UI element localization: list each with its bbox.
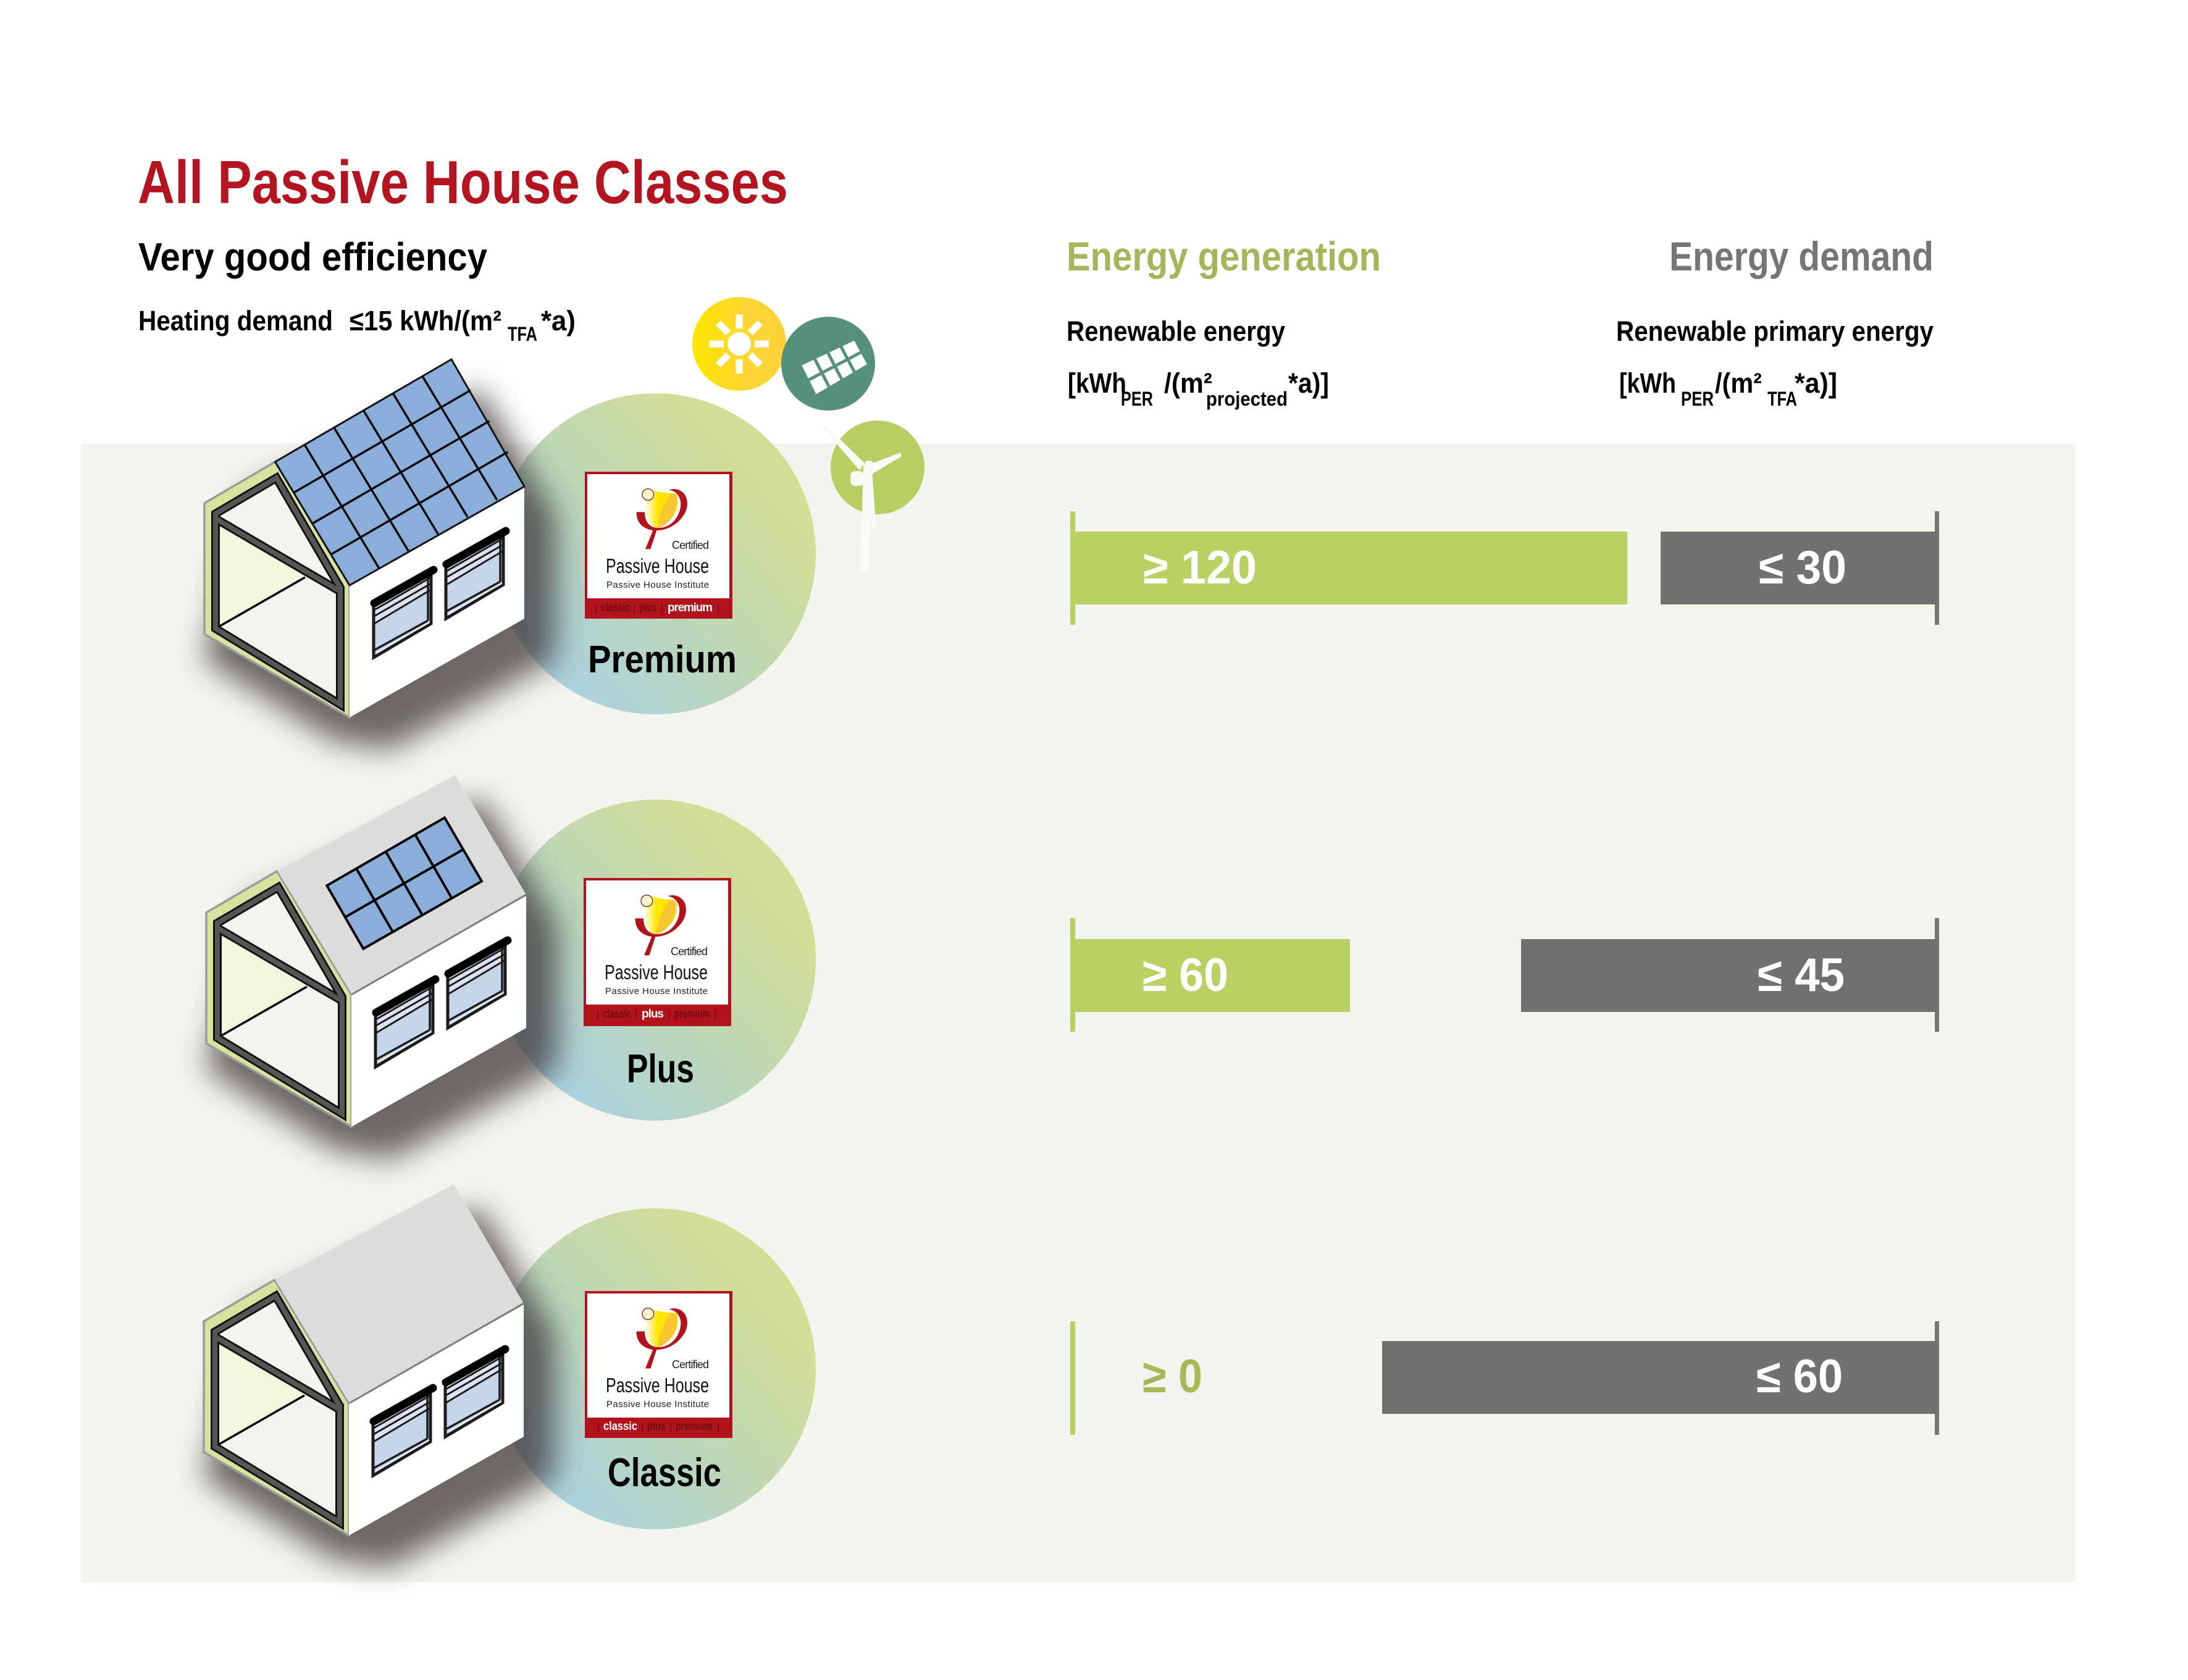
- demand unit label: Renewable primary energy: [1616, 316, 1934, 347]
- premium demand bar: [1661, 511, 1939, 625]
- row: premium: [204, 359, 1939, 750]
- title: All Passive House Classes: [138, 148, 788, 216]
- premium generation bar: ≥ 120: [1143, 541, 1257, 594]
- premium house shadow: [204, 389, 556, 750]
- premium label: Premium: [588, 638, 737, 681]
- demand unit label: [1616, 316, 1934, 410]
- heading: energy generation: Energy generation: [1067, 233, 1381, 279]
- plus generation bar: [1070, 918, 1350, 1032]
- plus label: Plus: [627, 1046, 694, 1091]
- heating demand requirement: ≤15 kWh/(m²: [350, 305, 501, 336]
- classic certificate badge: Passive House: [606, 1374, 709, 1397]
- plus generation bar: ≥ 60: [1142, 949, 1228, 1001]
- icon: solar panel: [781, 317, 875, 411]
- plus certificate badge: Passive House Institute: [605, 986, 708, 997]
- plus certificate badge: premium: [674, 1008, 710, 1021]
- plus roof with small solar array: [277, 775, 526, 995]
- plus house: [206, 775, 526, 1127]
- heating demand requirement: Heating demand: [138, 305, 333, 336]
- plus house shadow: [206, 798, 558, 1160]
- demand unit label: TFA: [1767, 388, 1797, 410]
- demand unit label: /(m²: [1715, 367, 1762, 399]
- classic certificate badge: Passive House Institute: [606, 1399, 709, 1410]
- demand unit label: *a)]: [1795, 367, 1837, 399]
- row: plus: [206, 775, 1939, 1160]
- classic generation bar: [1070, 1321, 1202, 1435]
- premium certificate badge: classic: [601, 601, 630, 614]
- classic certificate badge: premium: [676, 1420, 713, 1433]
- premium certificate badge: [585, 472, 732, 619]
- classic certificate badge: classic: [603, 1420, 637, 1433]
- heating demand requirement: *a): [541, 305, 576, 336]
- plus demand bar: ≤ 45: [1758, 949, 1845, 1001]
- classic certificate badge: [585, 1291, 732, 1438]
- plus circle: [495, 800, 816, 1121]
- classic plain roof: [274, 1184, 524, 1403]
- plus certificate badge: plus: [642, 1008, 664, 1021]
- classic house shadow: [203, 1207, 555, 1568]
- plus certificate badge: Passive House: [605, 961, 708, 984]
- icon: wind turbine: [821, 420, 924, 572]
- classic demand bar: [1382, 1321, 1939, 1435]
- premium certificate badge: Passive House: [606, 554, 709, 577]
- heating demand requirement: [138, 305, 576, 345]
- premium certificate badge: Passive House Institute: [606, 580, 709, 590]
- plus certificate badge: [584, 878, 731, 1026]
- premium certificate badge: Certified: [672, 539, 709, 551]
- generation unit label: *a)]: [1288, 367, 1329, 399]
- generation unit label: /(m²: [1164, 367, 1212, 399]
- generation unit label: [1067, 316, 1329, 410]
- icon: sun: [692, 297, 786, 391]
- background panel: [81, 443, 2076, 1582]
- classic circle: [495, 1208, 816, 1529]
- premium generation bar: [1070, 511, 1627, 625]
- heating demand requirement: TFA: [508, 323, 537, 345]
- classic label: Classic: [608, 1450, 721, 1495]
- classic demand bar: ≤ 60: [1756, 1350, 1843, 1403]
- generation unit label: Renewable energy: [1067, 316, 1285, 347]
- heading: energy demand: Energy demand: [1669, 233, 1934, 279]
- row: classic: [203, 1184, 1939, 1568]
- plus demand bar: [1521, 918, 1939, 1032]
- subtitle: very good efficiency: Very good efficiency: [138, 235, 487, 279]
- premium certificate badge: premium: [668, 601, 713, 614]
- premium circle: [495, 393, 816, 714]
- plus certificate badge: Certified: [671, 945, 708, 958]
- generation unit label: projected: [1206, 388, 1288, 410]
- demand unit label: PER: [1681, 388, 1714, 410]
- generation unit label: [kWh: [1068, 367, 1126, 399]
- classic certificate badge: plus: [647, 1420, 666, 1433]
- generation unit label: PER: [1121, 388, 1153, 410]
- classic generation bar: ≥ 0: [1142, 1350, 1202, 1403]
- classic certificate badge: Certified: [672, 1358, 709, 1371]
- classic house: [204, 1184, 524, 1536]
- premium certificate badge: plus: [639, 601, 656, 614]
- premium demand bar: ≤ 30: [1759, 541, 1846, 594]
- plus certificate badge: classic: [603, 1008, 631, 1021]
- premium roof with full solar array: [275, 359, 524, 585]
- demand unit label: [kWh: [1619, 367, 1676, 399]
- premium house: [204, 359, 524, 717]
